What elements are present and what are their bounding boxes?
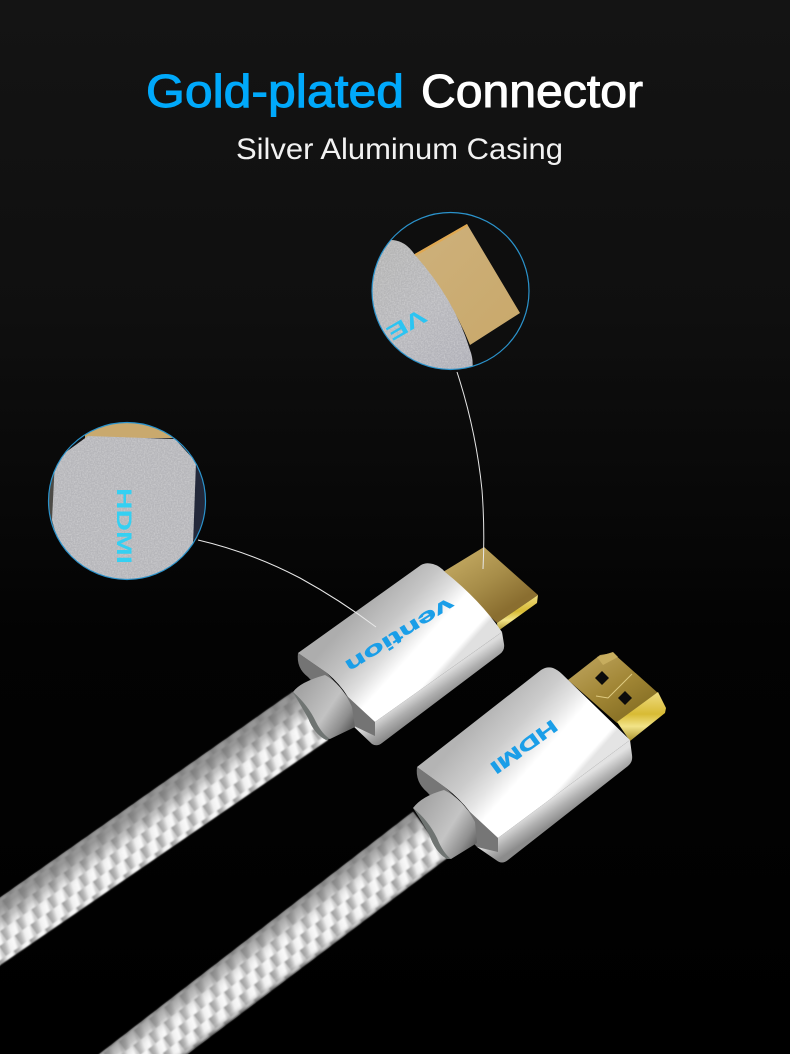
gold plug lower [568,652,666,741]
braided cable: upper connector [0,692,328,979]
contact lines [596,674,632,698]
casing shell upper [352,632,504,745]
silver casing surface [372,240,473,369]
leader line to gold plug [457,372,484,569]
gold strip [85,423,172,438]
casing interior upper [298,653,375,740]
VE logo fragment: VE [382,304,430,345]
HDMI logo: HDMI [487,716,561,778]
upper connector: vention [293,547,538,745]
grommet upper [293,675,355,739]
grommet lower [413,790,477,859]
casing interior lower [417,767,498,860]
vention logo: vention [341,593,457,676]
title: Connector [421,65,643,117]
subtitle: Silver Aluminum Casing [236,133,563,166]
casing face lower [417,667,630,838]
magnified circle: gold plug [360,212,529,372]
contact holes [595,671,609,685]
magnified circle: HDMI casing [48,420,208,585]
silver casing surface [52,436,196,585]
title: Gold-plated [146,65,404,117]
title [146,65,643,117]
gold plug upper [443,547,538,631]
leader line to casing [198,540,376,627]
side shadows [49,473,55,530]
casing face upper [298,563,502,722]
HDMI logo magnified: HDMI [112,488,135,564]
braided cable: lower connector [79,812,447,1054]
gold contact surface [413,224,520,345]
casing shell lower [477,740,632,862]
lower connector: HDMI [413,652,666,862]
